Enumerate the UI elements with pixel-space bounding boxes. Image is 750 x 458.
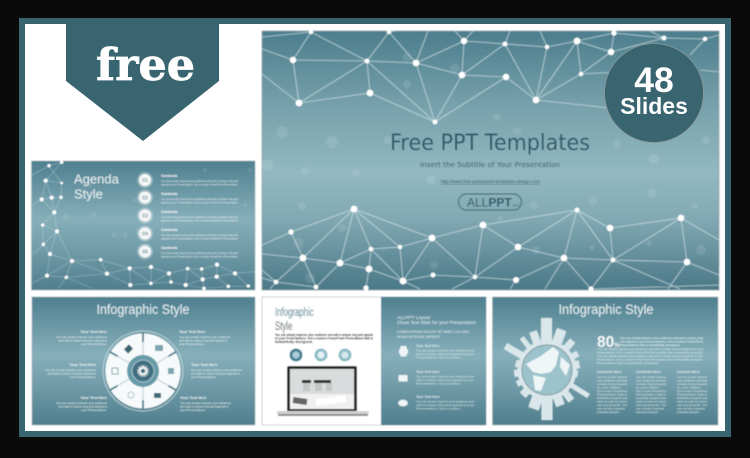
logo: ALLPPT: .com — [512, 203, 519, 207]
network: top nodes — [290, 30, 707, 124]
globe slide column 1: You can simply impress — [597, 375, 627, 379]
agenda item 01: You can simply impress your audience and add a unique zing and — [161, 179, 238, 183]
globe slide intro text: Presentation that is beautifully designed. — [597, 361, 659, 365]
globe slide column 2: beautifully designed — [636, 410, 658, 414]
globe slide intro text: Presentations. Get a modern PowerPoint Presentation that is beautifully designed. — [597, 350, 703, 354]
laptop slide items: add a unique zing and appeal to your — [416, 378, 474, 382]
globe slide column 1: beautifully designed and — [597, 396, 627, 400]
panel: agenda slide — [32, 161, 255, 290]
globe slide column 3 — [677, 370, 708, 414]
laptop slide items — [416, 344, 474, 410]
wheel labels left: You can simply impress your audience — [45, 368, 96, 372]
globe slide column 2: beautifully designed and — [636, 396, 666, 400]
agenda item 04: 04 — [142, 232, 149, 238]
globe slide column 2: easy to edit for every — [636, 400, 667, 404]
globe slide column 2: your audience and add — [636, 378, 666, 382]
wheel labels right — [179, 330, 242, 412]
laptop slide items: You can simply impress your audience and — [416, 400, 474, 404]
agenda item 04: Contents — [161, 228, 177, 232]
icon: speech bubble — [398, 400, 408, 406]
laptop slide items: add a unique zing and appeal to your — [416, 403, 474, 407]
laptop slide body text: beautifully designed. — [275, 340, 313, 344]
agenda item 03: 03 — [142, 214, 148, 220]
wheel labels right: and add a unique zing and appeal to — [179, 338, 228, 342]
globe slide column 1: user and presenter. You — [597, 403, 627, 407]
icon row — [290, 348, 352, 362]
globe slide column 3: to your slides. — [677, 386, 701, 390]
globe slide column 1: a unique zing and appeal — [597, 382, 627, 386]
globe slide column 2: Presentation that is — [636, 392, 667, 396]
wheel labels right: You can simply impress your audience — [180, 401, 231, 405]
agenda item 05: appeal to your Presentations. Get a modern PowerPoint Presentation — [161, 254, 238, 258]
globe slide column 3: Presentation that is — [677, 392, 708, 396]
icon: gear — [138, 366, 148, 376]
wheel labels left: your Presentations. — [81, 408, 107, 412]
agenda item 01 — [137, 172, 238, 188]
wheel slide title: Infographic Style — [96, 302, 190, 317]
badge: 48 Slides: 48 — [634, 60, 674, 100]
wheel labels left: your Presentations. — [70, 375, 96, 379]
globe slide column 2: user and presenter. You — [636, 403, 666, 407]
globe slide column 1: to your slides. — [597, 386, 621, 390]
panel: infographic wheel slide — [32, 297, 255, 425]
globe slide column 1 — [597, 370, 628, 414]
laptop slide items: add a unique zing and appeal to your — [416, 352, 474, 356]
agenda item 01: 01 — [142, 178, 148, 184]
globe slide column 1: Get a modern PowerPoint — [597, 389, 627, 393]
bokeh circles — [261, 52, 710, 283]
globe slide column 3: beautifully designed and — [677, 396, 707, 400]
wheel labels right: your Presentations. — [180, 408, 206, 412]
agenda item 05: You can simply impress your audience and add a unique zing and — [161, 251, 238, 255]
wheel labels left: and add a unique zing and appeal to — [58, 404, 107, 408]
globe slide column 1: Presentation that is — [597, 392, 628, 396]
wheel labels right: Your Text Here — [191, 363, 217, 367]
globe slide intro text — [597, 336, 703, 365]
agenda item 01: Contents — [161, 174, 177, 178]
wheel labels right: your Presentations. — [179, 342, 205, 346]
agenda item 04: appeal to your Presentations. Get a modern PowerPoint Presentation — [161, 236, 238, 240]
badge: 48 Slides: Slides — [620, 93, 688, 119]
laptop slide heading: Infographic — [275, 307, 332, 319]
wheel labels left: You can simply impress your audience — [56, 401, 107, 405]
agenda item 02 — [137, 190, 238, 206]
laptop slide heading: Style — [275, 321, 292, 333]
agenda item 02: appeal to your Presentations. Get a modern PowerPoint Presentation — [161, 200, 238, 204]
globe slide column 3: Get a modern PowerPoint — [677, 389, 707, 393]
agenda item 02: Contents — [161, 192, 177, 196]
laptop slide items: Presentations. Get a modern. — [416, 382, 461, 386]
agenda item 03 — [137, 208, 238, 224]
globe slide column 2: Contents Here — [636, 370, 661, 374]
laptop slide items: Your Text Here — [416, 370, 440, 374]
laptop slide right heading — [397, 315, 476, 339]
agenda heading: Agenda — [74, 172, 119, 186]
wheel labels left: and add a unique zing and appeal to — [58, 338, 107, 342]
agenda heading: Style — [74, 186, 103, 202]
agenda item 02: You can simply impress your audience and add a unique zing and — [161, 197, 238, 201]
wheel labels right: and add a unique zing and appeal to — [191, 372, 240, 376]
agenda item 03: You can simply impress your audience and add a unique zing and — [161, 215, 238, 219]
globe slide column 3: a unique zing and appeal — [677, 382, 707, 386]
agenda item 01: appeal to your Presentations. Get a modern PowerPoint Presentation — [161, 182, 238, 186]
wheel labels right: Your Text Here — [179, 330, 205, 334]
globe slide title: Infographic Style — [558, 302, 654, 317]
network: bottom — [262, 209, 719, 289]
laptop slide right heading: Clean Text Slide for your Presentation — [397, 320, 476, 325]
globe slide column 3: easy to edit for every — [677, 400, 708, 404]
stat: 80%: 80% — [597, 334, 620, 351]
subtitle: Insert the Subtitle of Your Presentation — [420, 160, 560, 169]
bokeh agenda — [63, 168, 252, 237]
wheel labels right: You can simply impress your audience — [191, 368, 242, 372]
laptop slide body text: You can simply impress your audience and add a unique zing and appeal — [275, 333, 373, 337]
globe slide column 2: a unique zing and appeal — [636, 382, 666, 386]
wheel labels left: Your Text Here — [81, 396, 107, 400]
globe slide column 1: beautifully designed — [597, 410, 619, 414]
globe slide intro text: You can simply impress your audience and add a unique zing and appeal to your — [597, 347, 703, 351]
globe slide column 1: your audience and add — [597, 378, 627, 382]
wheel labels right: your Presentations. — [191, 375, 217, 379]
wheel labels right: You can simply impress your audience — [179, 335, 230, 339]
wheel labels left: Your Text Here — [70, 363, 96, 367]
laptop slide items: You can simply impress your audience and — [416, 374, 474, 378]
globe slide intro text: Presentation that is beautifully designed. — [620, 343, 680, 347]
network: bottom nodes — [274, 206, 690, 292]
globe slide intro text: You can simply impress your audience and add a unique zing and appeal to your — [597, 354, 703, 358]
globe slide column 1: can simply impress — [597, 406, 626, 410]
globe slide column 3: Content Here — [677, 370, 700, 374]
laptop slide right heading: LOREM IPSUM DOLOR SIT AMET, CU USU — [397, 330, 469, 334]
network: agenda — [32, 161, 255, 290]
agenda item 04: You can simply impress your audience and add a unique zing and — [161, 233, 238, 237]
right teal half — [381, 297, 486, 425]
wheel labels left: and add a unique zing and appeal to — [47, 372, 96, 376]
wheel labels left — [45, 330, 107, 412]
panel: laptop slide — [262, 297, 486, 425]
laptop slide items: Your Text Here — [416, 344, 440, 348]
wheel labels right: Your Text Here — [180, 396, 206, 400]
globe slide column 3: You can simply impress — [677, 375, 707, 379]
laptop slide items: Your Text Here — [416, 395, 440, 399]
globe slide intro text: and appeal to your Presentations. Get a modern PowerPoint — [620, 340, 703, 344]
illustration: globe and city — [504, 318, 590, 420]
globe slide column 1: Contents Here — [597, 370, 622, 374]
globe slide intro text: You can simply impress your audience and add a unique zing — [620, 336, 703, 340]
globe slide column 2: can simply impress — [636, 406, 665, 410]
logo: ALLPPT: ALLPPT — [467, 196, 512, 210]
globe slide intro text: Presentations. Get a modern PowerPoint Presentation that is beautifully designed. — [597, 358, 703, 362]
main title: Free PPT Templates — [390, 131, 590, 156]
logo: ALLPPT — [458, 194, 522, 210]
wheel labels left: Your Text Here — [81, 330, 107, 334]
agenda item 05 — [137, 244, 238, 260]
globe slide column 3: your audience and add — [677, 378, 707, 382]
ribbon: free: free — [96, 40, 195, 91]
wheel labels left: You can simply impress your audience — [56, 335, 107, 339]
icon: envelope — [398, 375, 408, 382]
wheel icons — [112, 344, 174, 398]
network: top — [262, 31, 719, 122]
ribbon: free — [66, 24, 219, 141]
globe slide column 2: Get a modern PowerPoint — [636, 389, 666, 393]
laptop slide body text: to your Presentations. Get a modern PowerPoint Presentation that is — [275, 336, 373, 340]
globe slide column 2: You can simply impress — [636, 375, 666, 379]
globe slide column 3: user and presenter. You — [677, 403, 707, 407]
globe slide column 2: to your slides. — [636, 386, 660, 390]
laptop slide items: Presentations. Get a modern. — [416, 406, 461, 410]
icon: printer — [399, 346, 408, 356]
globe slide column 1: easy to edit for every — [597, 400, 628, 404]
agenda item 05: Contents — [161, 246, 177, 250]
panel: globe slide — [492, 297, 718, 425]
laptop slide items: You can simply impress your audience and — [416, 348, 474, 352]
agenda item 04 — [137, 226, 238, 242]
wheel labels left: your Presentations. — [81, 342, 107, 346]
laptop slide body text — [275, 333, 373, 344]
laptop slide right heading: AGAM INTEGRE IMPEDIT. — [397, 335, 441, 339]
url: http://www.free-powerpoint-templates-design.com — [441, 179, 541, 184]
laptop slide items: Presentations. Get a modern. — [416, 356, 461, 360]
laptop slide right heading: ALLPPT Layout — [397, 315, 431, 320]
wheel chart — [103, 331, 183, 411]
badge: 48 Slides — [604, 44, 704, 142]
globe slide column 2 — [636, 370, 667, 414]
wheel labels right: and add a unique zing and appeal to — [180, 404, 229, 408]
agenda item 02: 02 — [142, 196, 148, 202]
globe slide column 3: beautifully designed — [677, 410, 699, 414]
agenda item 05: 05 — [142, 250, 148, 256]
laptop illustration — [277, 366, 369, 416]
agenda item 03: appeal to your Presentations. Get a modern PowerPoint Presentation — [161, 218, 238, 222]
agenda item 03: Contents — [161, 210, 177, 214]
globe slide column 3: can simply impress — [677, 406, 706, 410]
panel: main title slide — [261, 30, 719, 292]
